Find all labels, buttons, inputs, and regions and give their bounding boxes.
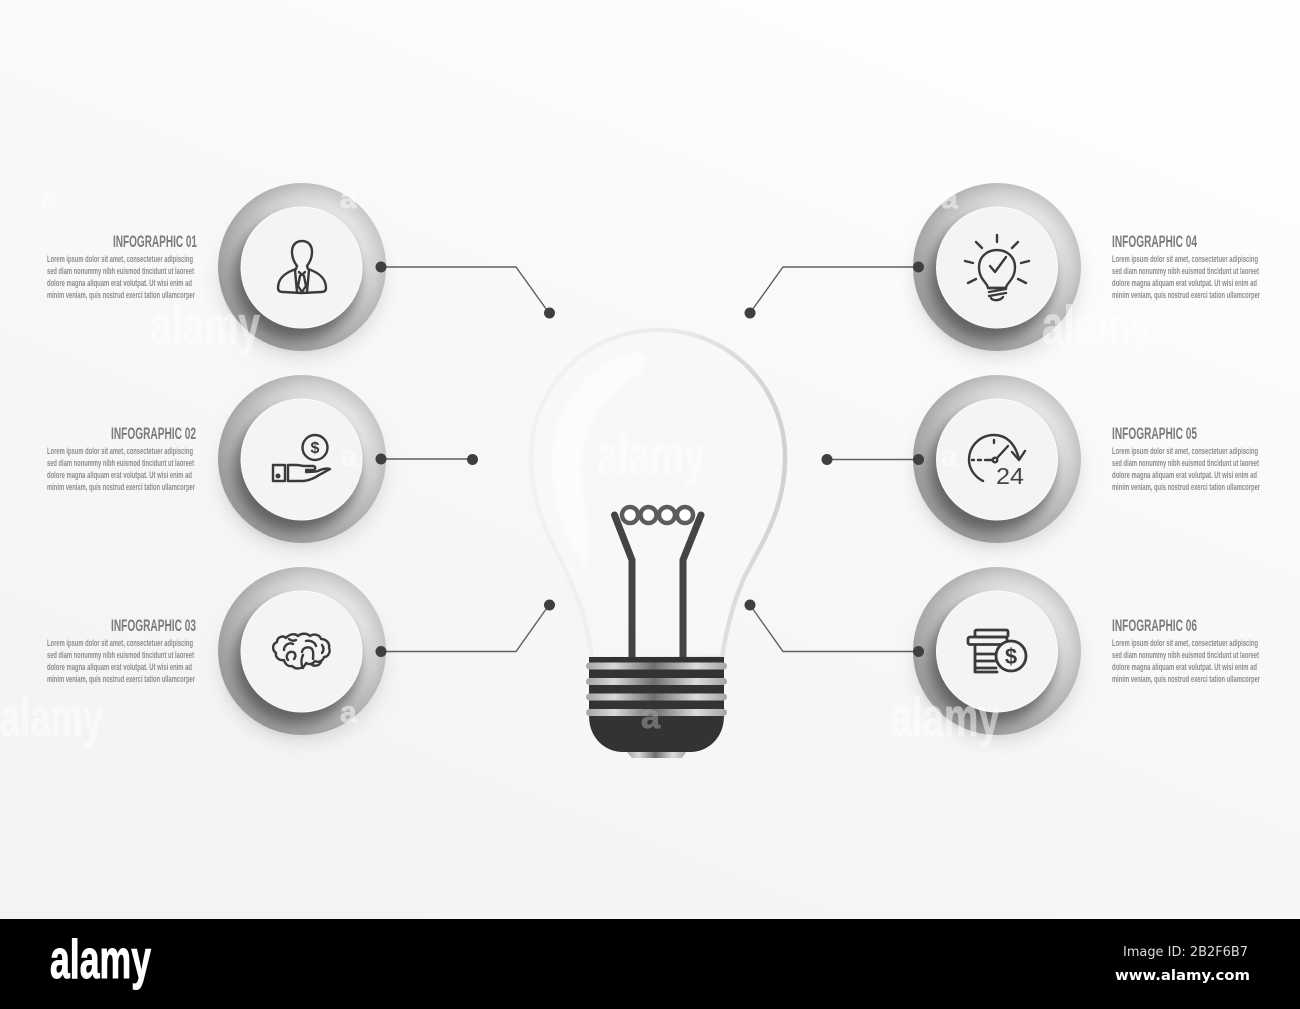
watermarks: a (340, 696, 357, 729)
filament wires (614, 515, 701, 660)
text block 02: Lorem ipsum dolor sit amet, consectetuer adipiscing (47, 446, 193, 457)
bulb glass (531, 330, 785, 658)
disc 02 (241, 399, 362, 520)
text block 01: dolore magna aliquam erat volutpat. Ut wisi enim ad (47, 278, 192, 289)
watermarks: a (41, 182, 58, 215)
text block 02: minim veniam, quis nostrud exerci tation ullamcorper (47, 482, 195, 493)
central light bulb (531, 330, 785, 758)
disc 04 (936, 207, 1058, 328)
screw base (589, 657, 724, 752)
disc 01 (241, 207, 362, 328)
connector 05 (822, 454, 924, 465)
text block 01 (47, 254, 195, 301)
watermarks: alamy (1042, 294, 1152, 356)
text block 02: sed diam nonummy nibh euismod tincidunt ut laoreet (47, 458, 195, 469)
watermarks: alamy (150, 294, 260, 356)
base contact tip (627, 752, 686, 758)
heading 05: INFOGRAPHIC 05 (1112, 424, 1197, 443)
icon: hand with coin (273, 435, 330, 481)
heading 03: INFOGRAPHIC 03 (111, 616, 196, 635)
text block 03: minim veniam, quis nostrud exerci tation ullamcorper (47, 674, 195, 685)
ring 02 (218, 375, 386, 543)
footer logo: alamy (50, 928, 151, 990)
panel: infographic 06 (744, 567, 1260, 742)
icon: coin stack (968, 630, 1026, 672)
connector 02 (376, 454, 478, 465)
panel: infographic 04 (744, 183, 1260, 358)
text block 04 (1112, 254, 1260, 301)
heading 06: INFOGRAPHIC 06 (1112, 616, 1197, 635)
ring 06 (913, 567, 1081, 735)
filament coils (622, 507, 693, 523)
panel: infographic 01 (47, 183, 555, 358)
watermarks: alamy (890, 686, 1000, 748)
watermarks: alamy (0, 686, 103, 748)
text block 02 (47, 446, 195, 493)
footer bar (0, 919, 1300, 1009)
connector 04 (744, 262, 924, 318)
base thread bands (586, 662, 727, 716)
disc 03 (241, 591, 362, 712)
watermarks: a (340, 182, 357, 215)
ring 05 (913, 375, 1081, 543)
text block 03: sed diam nonummy nibh euismod tincidunt ut laoreet (47, 650, 195, 661)
ring 01 (218, 183, 386, 351)
icon: 24 hour clock (969, 435, 1025, 481)
text block 01: sed diam nonummy nibh euismod tincidunt ut laoreet (47, 266, 195, 277)
watermarks: a (941, 440, 958, 473)
text block 05 (1112, 446, 1260, 493)
text block 01: Lorem ipsum dolor sit amet, consectetuer adipiscing (47, 254, 193, 265)
panel: infographic 05 (822, 375, 1260, 550)
icon: brain (273, 634, 330, 668)
icon label: 24: 24 (996, 463, 1024, 489)
text block 01: minim veniam, quis nostrud exerci tation ullamcorper (47, 290, 195, 301)
heading 02: INFOGRAPHIC 02 (111, 424, 196, 443)
connector 06 (744, 600, 924, 657)
heading 04: INFOGRAPHIC 04 (1112, 232, 1197, 251)
watermarks: alamy (597, 424, 705, 486)
ring 04 (913, 183, 1081, 351)
watermarks: a (941, 182, 958, 215)
website: www.alamy.com (1115, 968, 1250, 984)
text block 03: Lorem ipsum dolor sit amet, consectetuer adipiscing (47, 638, 193, 649)
bulb highlight (552, 352, 646, 570)
panel: infographic 02 (47, 375, 478, 550)
disc 05 (936, 399, 1058, 520)
watermarks: a (641, 698, 661, 736)
icon: light bulb with check (965, 235, 1029, 300)
heading 01: INFOGRAPHIC 01 (113, 232, 197, 251)
icon: businessman (278, 241, 326, 293)
text block 03 (47, 638, 195, 685)
panel: infographic 03 (47, 567, 555, 742)
watermarks (0, 182, 1152, 748)
watermarks: a (340, 440, 357, 473)
connector 03 (376, 600, 555, 657)
icon: dollar sign on coin: $ (311, 440, 320, 457)
icon: dollar sign on coin stack: $ (1005, 644, 1017, 669)
image id: Image ID: 2B2F6B7 (1123, 944, 1248, 960)
text block 06 (1112, 638, 1260, 685)
text block 02: dolore magna aliquam erat volutpat. Ut wisi enim ad (47, 470, 192, 481)
text block 03: dolore magna aliquam erat volutpat. Ut wisi enim ad (47, 662, 192, 673)
ring 03 (218, 567, 386, 735)
connector 01 (376, 262, 555, 318)
disc 06 (936, 591, 1058, 712)
